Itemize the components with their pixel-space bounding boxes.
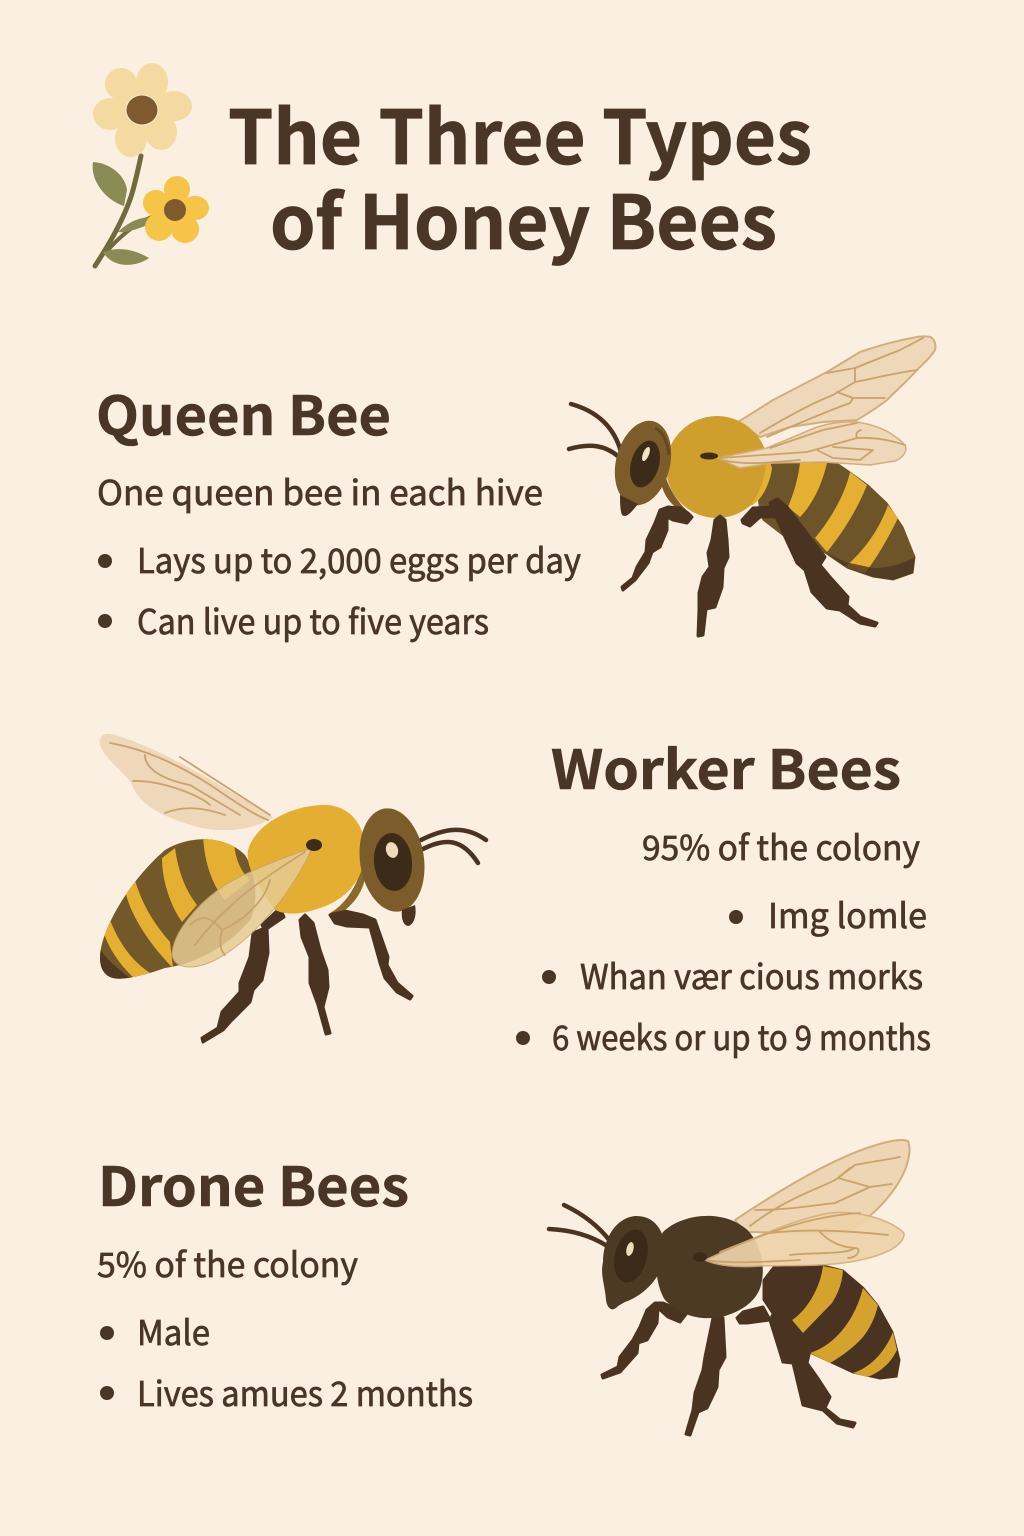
text: worker summary: 95% of the colony [642, 821, 920, 870]
title: of Honey Bees [270, 164, 777, 271]
drone legs [602, 1303, 855, 1435]
icon: drone bee illustration [549, 1140, 909, 1435]
worker abdomen [100, 839, 255, 979]
worker thorax underside [330, 865, 366, 913]
bullet: male [100, 1306, 210, 1355]
drone thorax [656, 1216, 763, 1318]
worker upper wing [100, 734, 273, 830]
text: drone summary: 5% of the colony [97, 1238, 358, 1287]
queen upper wing [738, 336, 936, 437]
queen lower wing [718, 422, 906, 468]
worker thorax [248, 805, 365, 914]
queen thorax [666, 416, 768, 518]
bullet: worker lifespan: 6 weeks or up to 9 months [552, 1011, 931, 1060]
heading: worker bees: Worker Bees [551, 726, 901, 805]
queen neck [660, 470, 692, 515]
panel: worker bees [98, 726, 931, 1060]
queen legs [622, 499, 877, 636]
title [228, 79, 812, 271]
queen abdomen [759, 463, 915, 580]
stem [95, 156, 141, 266]
worker antennae [421, 830, 486, 840]
worker head [353, 804, 431, 916]
leaves [93, 162, 127, 206]
heading: queen bee: Queen Bee [96, 372, 391, 451]
small flower [143, 176, 209, 243]
queen abdomen stripes [788, 463, 898, 573]
drone head [602, 1216, 665, 1309]
drone upper wing [735, 1140, 909, 1233]
title: The Three Types [228, 79, 812, 186]
large flower [93, 63, 192, 157]
queen head [606, 415, 680, 511]
worker front wing [172, 848, 312, 967]
text: queen summary: One queen bee in each hive [97, 466, 543, 515]
bullet: lifespan: Can live up to five years [137, 595, 489, 644]
icon: flowers [93, 63, 209, 266]
heading: drone bees: Drone Bees [98, 1143, 409, 1222]
panel: queen bee [96, 336, 936, 644]
drone abdomen stripes [792, 1266, 897, 1377]
icon: worker bee illustration [98, 734, 486, 1042]
bullet: first worker fact: Img lomle [768, 889, 927, 938]
bullet: male: Male [137, 1306, 210, 1355]
queen antennae [571, 404, 621, 452]
drone antennae [564, 1205, 610, 1241]
drone abdomen [763, 1265, 900, 1379]
panel: drone bees [97, 1140, 909, 1435]
icon: queen bee illustration [569, 336, 936, 636]
bullet: second worker fact: Whan vær cious morks [580, 950, 923, 999]
bullet: eggs: Lays up to 2,000 eggs per day [137, 534, 581, 583]
drone lower wing [705, 1212, 904, 1267]
bullet: drone lifespan: Lives amues 2 months [137, 1367, 473, 1416]
worker abdomen stripes [100, 839, 250, 979]
worker legs [202, 908, 412, 1042]
